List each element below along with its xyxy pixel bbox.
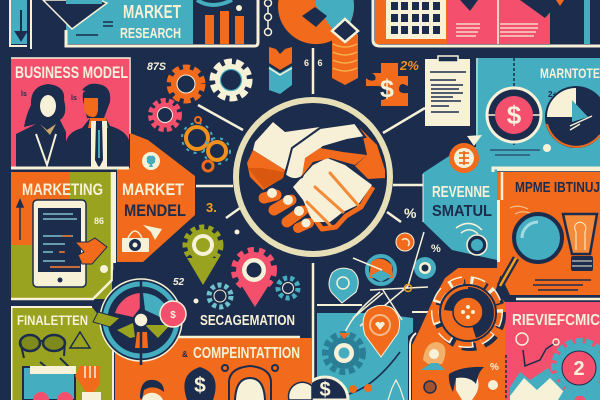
icon: hexagon tower bbox=[332, 19, 358, 85]
icon: headphone person bbox=[222, 365, 278, 400]
icon: teal chevron shield bbox=[269, 47, 292, 94]
heading: market research: MARKET bbox=[123, 2, 181, 22]
icon: network lines bbox=[342, 232, 428, 340]
icon: cream oval bbox=[288, 382, 312, 400]
panel: orange insight panel bbox=[493, 168, 600, 295]
label: 3: 3. bbox=[206, 200, 217, 215]
icon: price target: $ bbox=[507, 100, 522, 130]
panel: top-left market research bbox=[10, 0, 258, 49]
icon: chain links bbox=[264, 0, 272, 36]
heading: finaletten: FINALETTEN bbox=[17, 312, 88, 328]
icon: speech pointer bbox=[467, 135, 482, 146]
icon: person badge bbox=[516, 333, 559, 345]
icon: hub handshake bbox=[236, 100, 390, 254]
panel: teal pricing panel bbox=[423, 58, 600, 260]
panel: business model: ls bbox=[71, 95, 77, 102]
icon: tablet bbox=[33, 200, 86, 287]
icon: teal ring bbox=[414, 257, 436, 279]
label: 2 percent: 2% bbox=[399, 58, 419, 73]
icon: mountains bbox=[510, 368, 570, 400]
text lines bbox=[533, 280, 591, 290]
icon: teal pin bbox=[329, 268, 358, 303]
icon: lower-left target wheel: $ bbox=[170, 310, 176, 321]
heading: competition: COMPEINTATTION bbox=[193, 345, 300, 362]
icon: man avatar bbox=[449, 367, 484, 400]
connector lines from hub bbox=[196, 48, 425, 222]
icon: light bulb bbox=[563, 214, 597, 271]
icon: small badge bbox=[488, 380, 498, 390]
label: ampersand: & bbox=[182, 350, 188, 359]
icon: pie dial bbox=[546, 87, 600, 147]
panel: marketing: 86 bbox=[94, 216, 104, 226]
label: percent: % bbox=[490, 362, 499, 373]
icon: lower-left target wheel: 52 bbox=[173, 277, 185, 288]
icon: price target bbox=[487, 58, 541, 145]
icon: person head bbox=[140, 380, 164, 400]
icon: dollar bubble: $ bbox=[194, 374, 206, 397]
panel: market mendel bbox=[117, 133, 195, 262]
panel: business model bbox=[11, 58, 130, 168]
heading: marketing: MARKETING bbox=[22, 180, 103, 199]
icon: teal folder bbox=[23, 366, 76, 400]
icon: camera bbox=[122, 225, 162, 252]
panel: lower centre network bbox=[302, 205, 441, 400]
gear pin: olive bbox=[185, 227, 221, 285]
icon: small marks bbox=[40, 358, 70, 370]
panel: finaletten bbox=[11, 307, 113, 400]
panel: review pink bbox=[505, 299, 600, 400]
heading: market mendel bbox=[122, 180, 186, 220]
icon: orange location pin bbox=[363, 305, 400, 357]
panel: top-left market research: RESEARCH bbox=[120, 25, 181, 42]
icon: businessman bbox=[66, 84, 129, 168]
icon: clipboard document bbox=[425, 56, 470, 126]
icon: small orange circle bbox=[396, 233, 414, 251]
icon: dollar bubble bbox=[184, 367, 216, 400]
gear: large orange bbox=[435, 280, 502, 347]
gear pin: pink bbox=[234, 250, 274, 307]
label: segmentation: SECAGEMATION bbox=[200, 313, 295, 329]
icon: orange glove hand bbox=[75, 366, 101, 400]
heading: market mendel: MENDEL bbox=[124, 201, 186, 220]
panel: competition bbox=[115, 337, 312, 400]
gear: teal bbox=[325, 333, 363, 372]
icon: top centre pie circle bbox=[278, 0, 354, 44]
heading: business model: BUSINESS MODEL bbox=[15, 63, 128, 82]
icon: businesswoman bbox=[16, 84, 66, 168]
panel: top right calendar and pink panel bbox=[373, 0, 600, 46]
label: percent: % bbox=[431, 243, 441, 255]
gears: small orange cluster bbox=[182, 117, 230, 171]
icon: pointing hand bbox=[75, 238, 107, 264]
icon: lower-left target wheel bbox=[93, 270, 186, 365]
icon: puzzle dollar: $ bbox=[380, 75, 394, 103]
icon: orange badge bbox=[449, 143, 479, 173]
icon: award gear: 2 bbox=[573, 358, 585, 380]
gear: orange bbox=[169, 67, 203, 101]
label: 66: 6 6 bbox=[304, 58, 323, 68]
icon: orange ring bbox=[367, 256, 395, 284]
icon: line chart bbox=[523, 343, 555, 366]
icon: puzzle dollar bbox=[366, 63, 408, 106]
panel: orange gear panel bbox=[412, 214, 562, 400]
icon: rising trend line bbox=[344, 352, 404, 400]
panel: lower centre network: % bbox=[404, 205, 417, 221]
gear: cream bbox=[212, 62, 250, 98]
gear: small teal right bbox=[278, 278, 298, 298]
icon: dollar coin bbox=[302, 377, 348, 400]
panel: business model: ls bbox=[21, 91, 27, 98]
icon: brain bbox=[424, 381, 436, 393]
icon: dot connector bbox=[100, 265, 108, 273]
icon: warning triangle bbox=[70, 332, 90, 348]
panel: teal pricing panel: 2+ bbox=[548, 90, 557, 99]
heading: segmentation area bbox=[185, 227, 298, 329]
icon: woman avatar bbox=[421, 342, 445, 370]
icon: wifi badge bbox=[456, 223, 487, 255]
icon: clover badge bbox=[142, 152, 160, 170]
gear: pink bbox=[150, 100, 180, 130]
panel: marketing bbox=[11, 168, 129, 299]
icon: magnifying glass bbox=[500, 214, 562, 286]
icon: glasses bbox=[20, 335, 65, 358]
gear: small teal left bbox=[209, 285, 231, 307]
label: 87S: 87S bbox=[147, 61, 167, 73]
panel: teal pricing panel: SMATUL bbox=[432, 203, 492, 220]
heading: market mendel: MARKET bbox=[122, 180, 185, 199]
heading: revenue: REVENNE bbox=[432, 184, 490, 201]
